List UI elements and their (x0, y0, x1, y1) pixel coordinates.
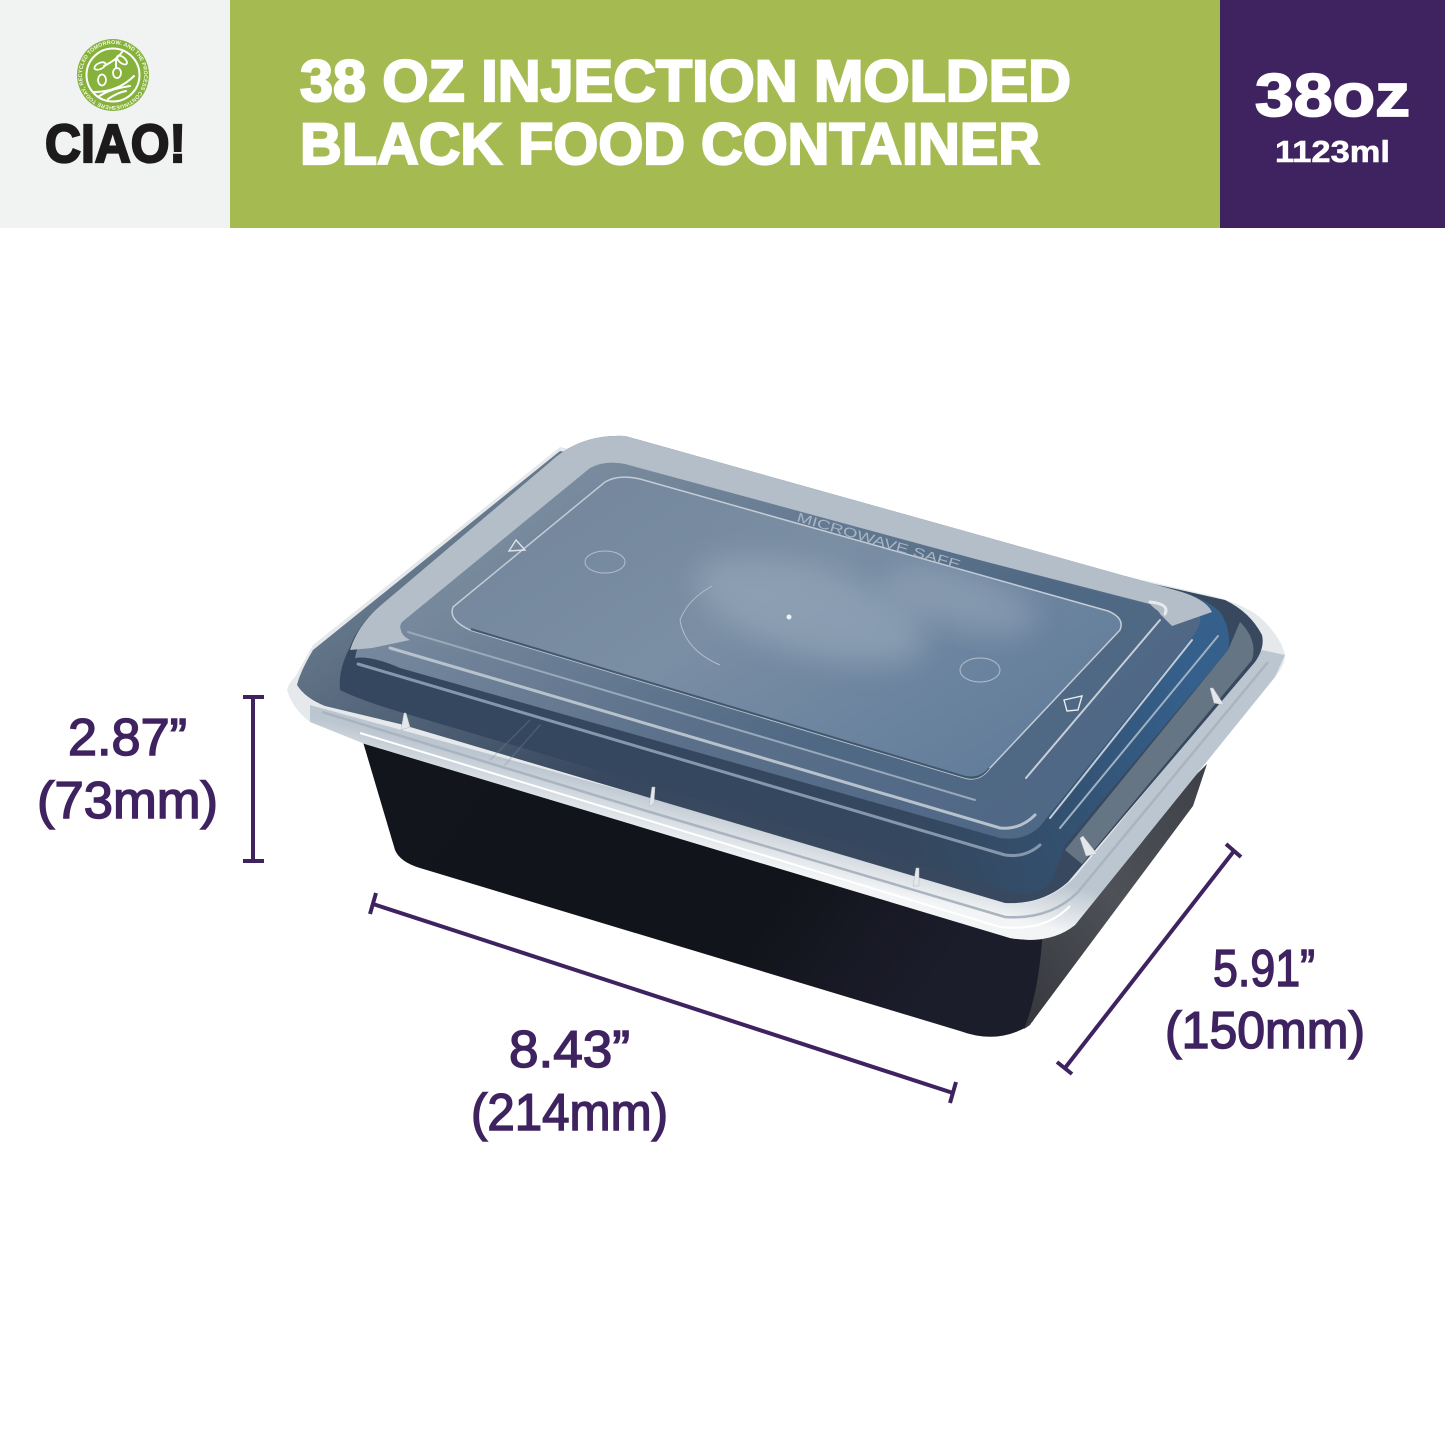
capacity in millilitres: 1123ml (1275, 134, 1390, 169)
header: capacity panel (1220, 0, 1445, 228)
title: BLACK FOOD CONTAINER (300, 112, 1040, 177)
dimension line: height (243, 697, 264, 861)
icon: recycling mark (509, 540, 525, 551)
lid shoulder (355, 442, 1200, 839)
dimension: width (1057, 844, 1365, 1074)
lid surface reflections (470, 554, 1035, 779)
label: width value: 5.91” (1213, 940, 1315, 998)
lid clips (401, 688, 1224, 886)
lid dome wall (340, 436, 1229, 894)
icon: recycled olive badge (77, 39, 149, 111)
label: height value: (73mm) (37, 772, 218, 830)
lid rim (287, 447, 1285, 940)
lid ridge highlights (358, 602, 1218, 856)
label: length value: 8.43” (509, 1021, 630, 1079)
product photo: food container with clear lid (287, 436, 1285, 1037)
title (300, 49, 1071, 177)
title: 38 OZ INJECTION MOLDED (300, 49, 1071, 114)
dimension line: width (1057, 844, 1241, 1074)
dimension line: length (370, 893, 956, 1103)
label: length value (471, 1021, 668, 1142)
dimension: length (370, 893, 956, 1142)
label: height value (37, 709, 218, 830)
label: width value: (150mm) (1165, 1002, 1365, 1060)
label: height value: 2.87” (68, 709, 187, 767)
moulded centre circle and gate mark (585, 551, 1000, 682)
capacity in ounces: 38oz (1255, 62, 1410, 129)
dimension: height (37, 697, 264, 861)
icon: cup and fork mark (1064, 696, 1082, 711)
logo wordmark: CIAO! (45, 114, 186, 174)
label: width value (1165, 940, 1365, 1060)
container body (363, 742, 1207, 1037)
label: length value: (214mm) (471, 1084, 668, 1142)
lid flat top panel (452, 477, 1121, 779)
lid translucent upper band (350, 436, 1212, 650)
header: logo panel (0, 0, 230, 228)
header: title panel (230, 0, 1220, 228)
moulded text: microwave safe: MICROWAVE SAFE (795, 509, 963, 572)
lid recess (400, 463, 1161, 799)
